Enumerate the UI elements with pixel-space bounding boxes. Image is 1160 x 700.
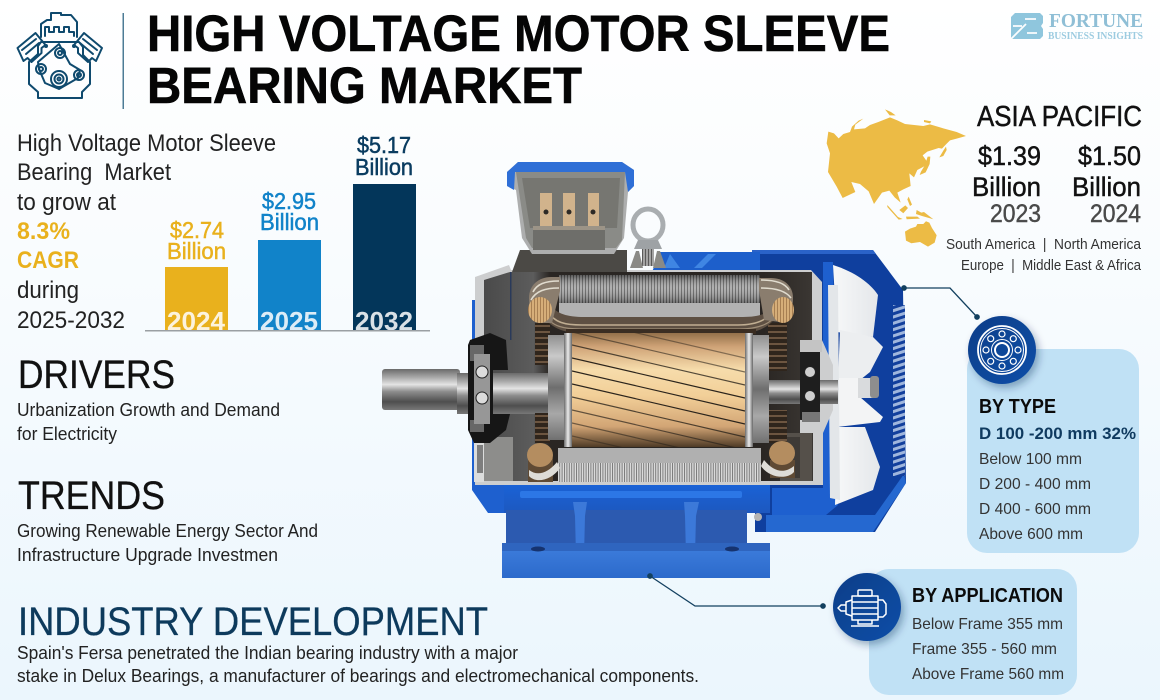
panel: by application: BY APPLICATION [912, 585, 1063, 607]
text block: market summary: High Voltage Motor Sleeve [17, 130, 276, 157]
text block: other regions [946, 237, 1142, 274]
motor: inner cavity [484, 272, 813, 481]
value 2024: Billion [1072, 172, 1141, 202]
panel: by application [833, 569, 1077, 695]
value 2023: 2023 [990, 200, 1041, 228]
bar chart [145, 132, 430, 336]
motor: lower stator [558, 448, 761, 482]
text block: market summary: CAGR [17, 247, 79, 274]
connector: motor to by application [648, 574, 825, 608]
motor: stator coil stacks [535, 323, 787, 443]
bar 2032 [353, 132, 416, 336]
value 2023: $1.39 [978, 141, 1041, 171]
value 2024: $1.50 [1078, 141, 1141, 171]
logo: Fortune Business Insights [1011, 10, 1143, 42]
text block: drivers: for Electricity [17, 424, 117, 444]
text block: other regions: Europe | Middle East & Africa [961, 258, 1142, 274]
motor illustration [382, 162, 906, 578]
bar 2025: $2.95 [262, 188, 316, 214]
bar 2024: Billion [167, 238, 226, 264]
title [147, 5, 890, 114]
panel: by type: BY TYPE [979, 396, 1056, 418]
text block: Asia Pacific values [972, 101, 1142, 228]
value 2024 [1072, 141, 1141, 228]
title: HIGH VOLTAGE MOTOR SLEEVE [147, 5, 890, 62]
icon: logo mark [1011, 13, 1043, 39]
text block: market summary: to grow at [17, 189, 116, 216]
panel: by type: D 200 - 400 mm [979, 476, 1091, 493]
panel: by application: Below Frame 355 mm [912, 616, 1063, 633]
panel: by application: Above Frame 560 mm [912, 666, 1064, 683]
motor: shafts [382, 369, 838, 414]
motor: lower windings [527, 441, 795, 482]
bar 2025: 2025 [260, 306, 318, 336]
text block: market summary: 8.3% [17, 218, 70, 245]
panel: by type: D 400 - 600 mm [979, 501, 1091, 518]
text block: market summary: 2025-2032 [17, 307, 125, 334]
motor: fan [828, 265, 883, 505]
text block: drivers: Urbanization Growth and Demand [17, 400, 280, 420]
motor: upper stator [541, 275, 781, 334]
motor: upper windings [528, 277, 794, 323]
text block: trends: Growing Renewable Energy Sector And [17, 521, 318, 541]
value 2023 [972, 141, 1041, 228]
bar 2032: Billion [355, 154, 413, 180]
text block: Asia Pacific values: ASIA PACIFIC [977, 101, 1142, 133]
text block: industry development [17, 600, 699, 686]
map: Asia Pacific [827, 109, 966, 247]
motor: rotor end rings [548, 333, 769, 447]
icon: electric motor [833, 573, 901, 641]
text block: industry development: INDUSTRY DEVELOPMENT [18, 600, 488, 644]
text block: other regions: South America | North America [946, 237, 1142, 253]
logo: Fortune Business Insights: BUSINESS INSIGHTS [1048, 31, 1143, 42]
motor: outer frame [475, 265, 833, 485]
bar 2025: Billion [260, 209, 319, 235]
panel: by application: Frame 355 - 560 mm [912, 641, 1057, 658]
icon: ball bearing [968, 316, 1036, 384]
bar 2024: 2024 [167, 306, 226, 336]
text block: industry development: Spain's Fersa penetrated the Indian bearing industry with a major [17, 643, 518, 663]
motor: rear blue fan cover [752, 250, 906, 532]
panel: by type: D 100 -200 mm 32% [979, 424, 1136, 443]
panel: by type: Below 100 mm [979, 451, 1082, 468]
panel: by type: Above 600 mm [979, 526, 1083, 543]
bar 2032: 2032 [355, 306, 413, 336]
bar 2032: $5.17 [357, 132, 411, 158]
motor: rear bearing [800, 340, 822, 422]
motor: terminal box [507, 162, 634, 254]
motor: eye bolt [630, 209, 666, 268]
text block: drivers: DRIVERS [18, 353, 175, 397]
logo: Fortune Business Insights: FORTUNE [1049, 10, 1143, 32]
text block: market summary: during [17, 277, 79, 304]
text block: market summary [17, 130, 276, 334]
divider [122, 13, 124, 109]
motor: rotor [572, 333, 745, 447]
motor: mounting foot [502, 485, 770, 578]
motor: blue left edge [472, 300, 504, 513]
text block: industry development: stake in Delux Bearings, a manufacturer of bearings and electromechanical components. [17, 666, 699, 686]
value 2023: Billion [972, 172, 1041, 202]
bar 2025 [258, 188, 321, 336]
text block: drivers [17, 353, 280, 444]
icon: engine [18, 13, 102, 98]
value 2024: 2024 [1090, 200, 1141, 228]
text block: trends: TRENDS [18, 474, 165, 518]
motor: blue top rib [652, 252, 760, 272]
text block: trends: Infrastructure Upgrade Investmen [17, 545, 278, 565]
connector: motor to by type [902, 286, 979, 319]
title: BEARING MARKET [147, 57, 582, 114]
bar 2024 [165, 217, 228, 336]
text block: market summary: Bearing Market [17, 159, 171, 186]
motor: front bearing [468, 333, 510, 443]
motor: terminal box neck [512, 250, 627, 272]
panel: by type [967, 316, 1139, 553]
bar 2024: $2.74 [170, 217, 224, 243]
text block: trends [17, 474, 318, 565]
